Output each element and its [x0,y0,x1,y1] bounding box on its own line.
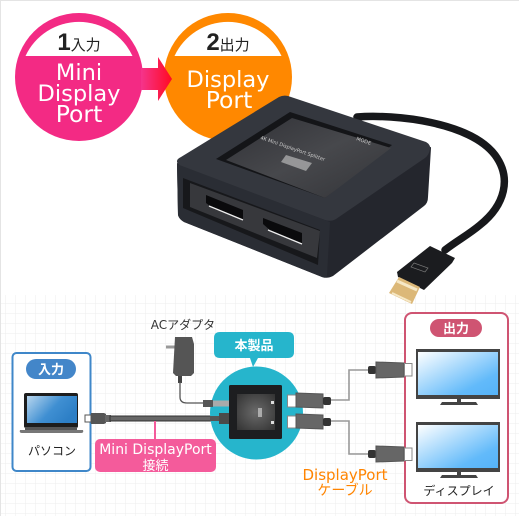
label: DisplayPort cable [302,466,388,499]
plate text: 4K Mini DisplayPort Splitter [259,135,327,163]
panel: input [12,353,90,471]
label: AC adapter: ACアダプタ [151,317,215,332]
input plug on splitter [210,413,230,424]
front panel [183,178,320,265]
Mini DisplayPort cable [85,413,222,424]
laptop label: パソコン [28,444,76,458]
label: Mini DisplayPort connection [95,439,216,474]
panel: input: 入力 [38,362,64,378]
circle: input Mini DisplayPort [15,13,143,141]
circle: input Mini DisplayPort: Port [56,100,102,128]
circle: output DisplayPort: 2出力 [206,29,250,56]
label: DisplayPort cable: ケーブル [317,482,373,499]
body side [177,147,431,278]
circle: product highlight [210,366,303,460]
body front [177,165,330,278]
product photo: splitter with cable: MODE [355,136,372,147]
icon: laptop [20,393,83,433]
output pill [430,319,482,337]
gold tip [389,277,420,304]
DisplayPort cable: lower [288,414,412,462]
label: Mini DisplayPort connection: 接続 [142,458,169,474]
DisplayPort cable: upper [288,362,412,408]
circle: input Mini DisplayPort: Mini [56,60,102,86]
panel: output: 出力 [443,321,469,337]
input pill [26,359,76,379]
display label: ディスプレイ [423,483,495,498]
pink connector line [154,421,156,440]
port icon on plug [411,263,428,272]
label: DisplayPort cable: DisplayPort [302,466,388,484]
circle: output DisplayPort [164,13,292,141]
panel: output [405,313,508,503]
callout: this product: 本製品 [234,338,274,354]
icon: AC adapter [166,337,204,403]
circle: output DisplayPort: Port [206,86,252,114]
body top [177,96,430,221]
callout: this product [214,332,294,367]
product photo: splitter with cable [177,96,504,304]
top plate [216,112,392,198]
cable [357,116,504,250]
circle: input Mini DisplayPort: Display [38,81,120,107]
diagram grid background [1,295,519,516]
arrow: input to output [141,57,172,101]
icon: splitter top view [229,385,282,439]
DisplayPort sockets [206,195,243,220]
icon: display 2 [416,422,500,478]
circle: output DisplayPort: Display [187,67,269,93]
circle: input Mini DisplayPort: 1入力 [57,29,101,56]
power plug on splitter [203,400,230,407]
label: Mini DisplayPort connection: Mini DisplayPort [99,442,212,458]
icon: display 1 [416,349,500,405]
mini plug [397,246,455,290]
